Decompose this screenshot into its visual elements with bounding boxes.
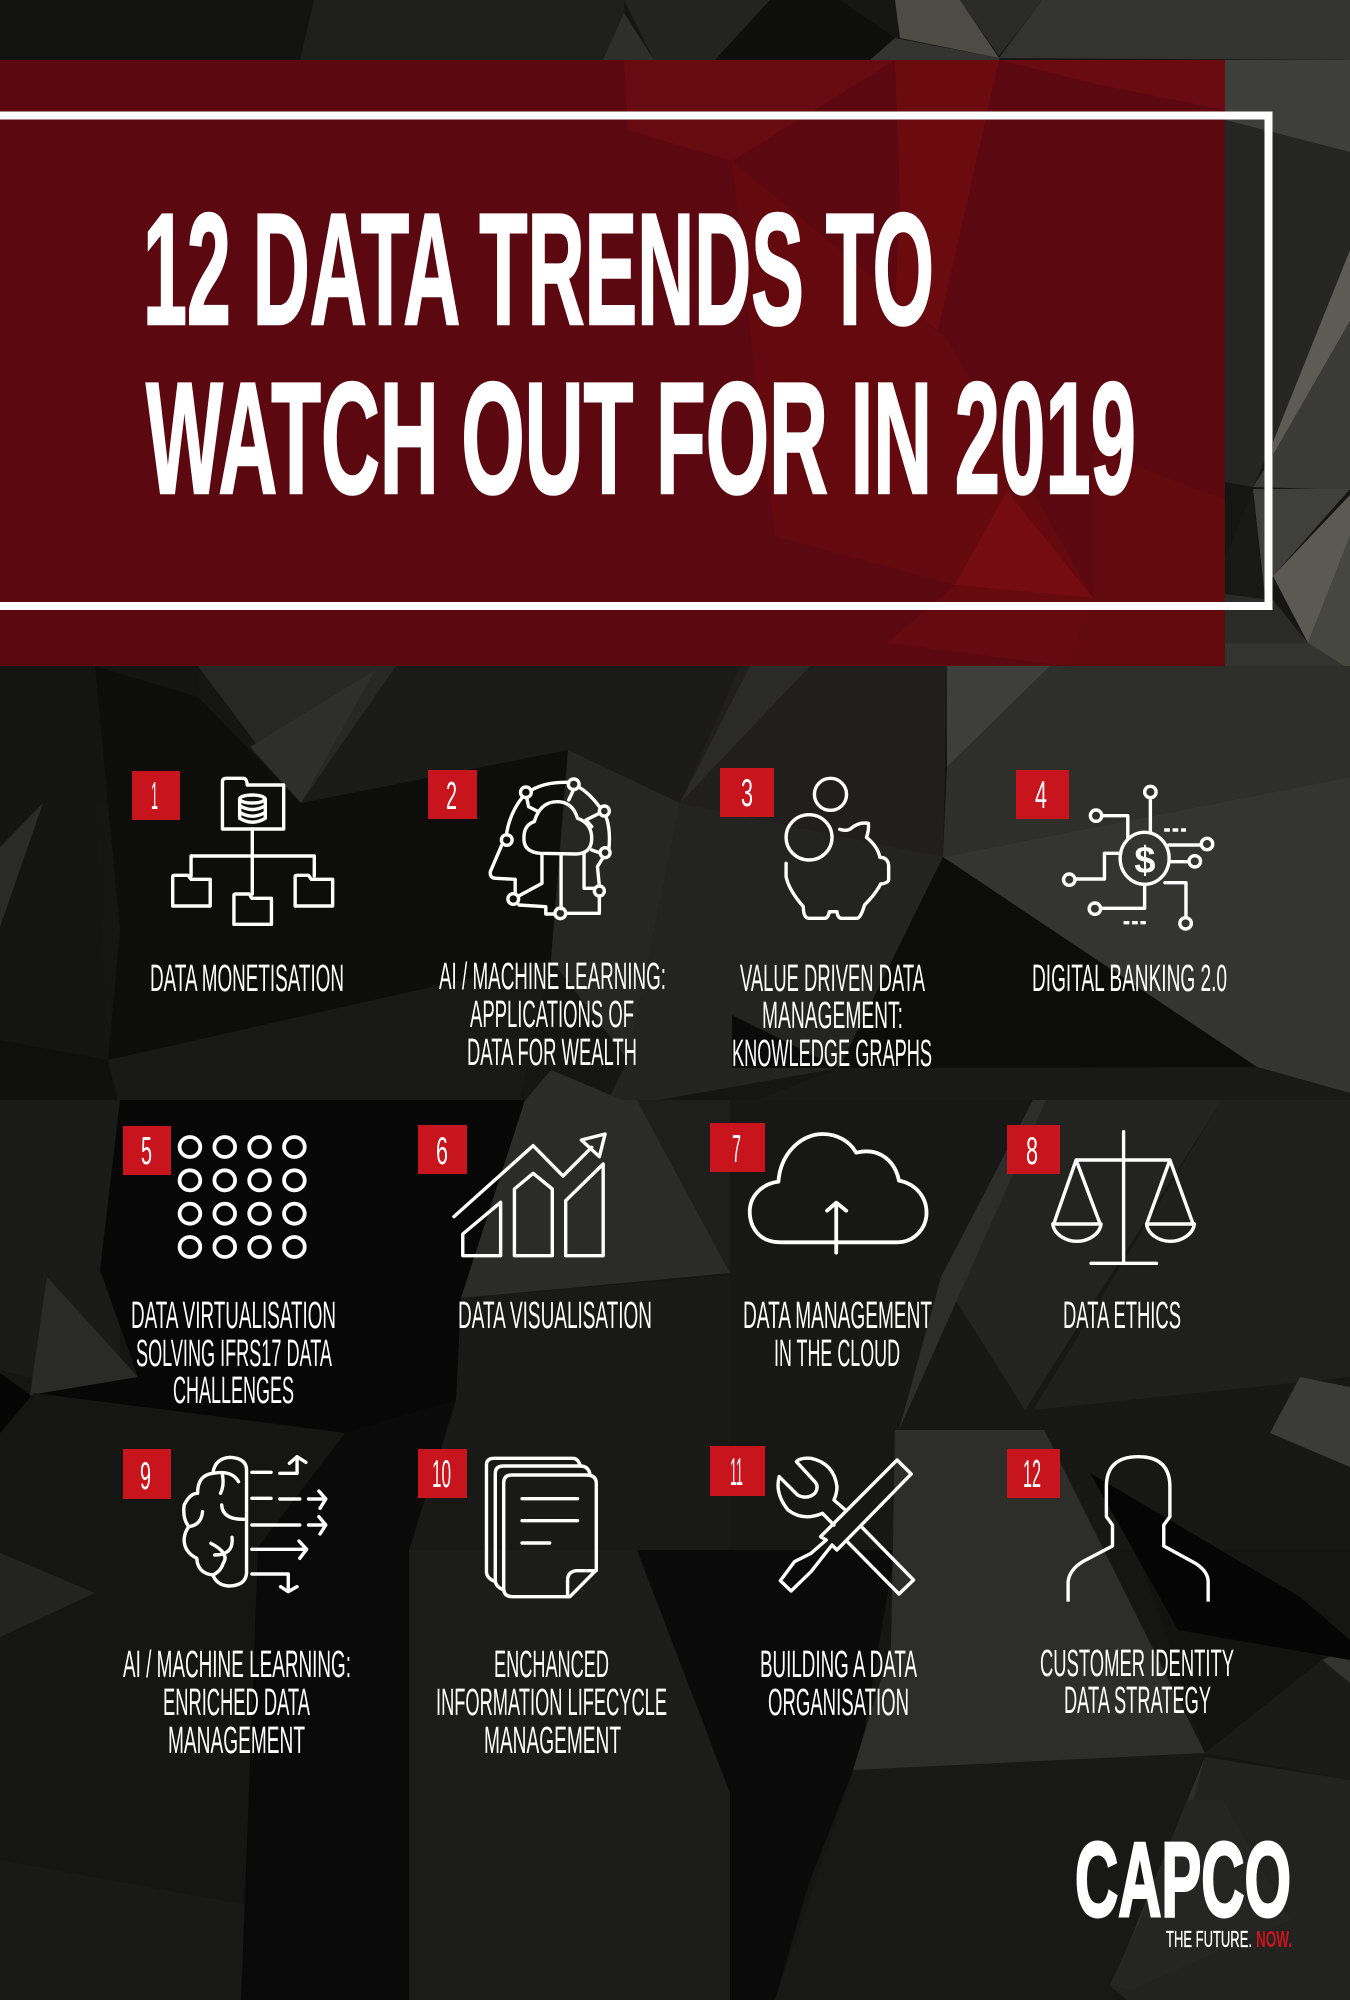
white title frame: [0, 116, 1268, 606]
label: DATA MANAGEMENT: [743, 1295, 932, 1337]
number badge 11: 11: [730, 1451, 743, 1494]
icon: brain with arrows: [184, 1457, 326, 1592]
label: [131, 1295, 336, 1412]
icon: piggy bank and coins: [786, 778, 889, 918]
label: [1040, 1643, 1234, 1722]
icon: person silhouette: [1068, 1457, 1208, 1602]
icon: dollar circuit: $: [1134, 840, 1156, 882]
number badge 7: 7: [732, 1128, 741, 1171]
label: APPLICATIONS OF: [470, 994, 634, 1036]
trend 8: data ethics: [1007, 1125, 1194, 1337]
label: ENCHANCED: [494, 1644, 609, 1686]
infographic canvas: BUILDING A DATA: [760, 1644, 917, 1686]
number badge 1: [132, 771, 180, 820]
number badge 10: 10: [432, 1453, 451, 1496]
number badge 5: [123, 1126, 171, 1175]
infographic canvas: SOLVING IFRS17 DATA: [136, 1333, 332, 1375]
trend 3: value driven data management: [720, 768, 932, 1075]
number badge 2: 2: [446, 775, 457, 818]
label: [732, 958, 932, 1075]
logo: Capco with tagline: NOW.: [1256, 1926, 1292, 1952]
label: VALUE DRIVEN DATA: [740, 958, 925, 1000]
panel: dark red title banner: [0, 60, 1225, 666]
trend 9: AI machine learning enriched data: [123, 1449, 351, 1762]
number badge 2: [428, 770, 477, 819]
label: ENRICHED DATA: [163, 1682, 310, 1724]
trend 12: customer identity data strategy: [1007, 1449, 1234, 1722]
icon: folder hierarchy with database: [173, 778, 333, 924]
number badge 12: [1007, 1449, 1060, 1498]
label: [760, 1644, 917, 1724]
trend 7: data management in the cloud: [710, 1123, 932, 1375]
number badge 4: 4: [1035, 774, 1047, 817]
number badge 8: [1007, 1125, 1060, 1174]
label: [439, 956, 666, 1074]
number badge 3: 3: [741, 772, 753, 815]
infographic canvas: AI / MACHINE LEARNING:: [123, 1644, 351, 1686]
title: [143, 180, 1136, 527]
icon: scales: [1053, 1132, 1194, 1263]
label: CHALLENGES: [173, 1370, 294, 1412]
infographic canvas: AI / MACHINE LEARNING:: [439, 956, 666, 998]
label: [123, 1644, 351, 1762]
trend 6: data visualisation: [418, 1125, 652, 1337]
trend 10: enhanced information lifecycle: [418, 1449, 667, 1762]
infographic canvas: KNOWLEDGE GRAPHS: [732, 1033, 932, 1075]
number badge 9: 9: [140, 1455, 151, 1498]
label: IN THE CLOUD: [774, 1333, 900, 1375]
icon: wrench and screwdriver: [778, 1458, 914, 1594]
number badge 7: [710, 1123, 765, 1172]
label: DATA FOR WEALTH: [467, 1032, 637, 1074]
number badge 8: 8: [1026, 1130, 1038, 1173]
label: MANAGEMENT: [168, 1720, 305, 1762]
trend 11: building a data organisation: [710, 1446, 917, 1724]
trend 5: data virtualisation: [123, 1126, 336, 1412]
icon: cloud upload: [750, 1134, 927, 1253]
trend 2: AI machine learning applications: [428, 770, 666, 1074]
number badge 9: [123, 1449, 171, 1499]
label: MANAGEMENT:: [762, 995, 903, 1037]
infographic canvas: DATA MONETISATION: [150, 958, 344, 1000]
label: [436, 1644, 667, 1762]
number badge 11: [710, 1446, 765, 1496]
label: ORGANISATION: [768, 1682, 909, 1724]
icon: grid of dots: [180, 1137, 305, 1257]
infographic canvas: DATA VIRTUALISATION: [131, 1295, 336, 1337]
icon: stacked documents: [486, 1458, 596, 1597]
icon: rising bar chart with arrow: [454, 1134, 605, 1256]
infographic canvas: INFORMATION LIFECYCLE: [436, 1682, 667, 1724]
number badge 10: [418, 1449, 467, 1498]
number badge 1: 1: [151, 775, 158, 818]
infographic canvas: DATA VISUALISATION: [458, 1295, 652, 1337]
icon: dollar circuit: [1064, 786, 1213, 929]
icon: head with cloud circuit: [490, 779, 610, 919]
number badge 6: [418, 1125, 467, 1174]
logo: Capco with tagline: THE FUTURE.: [1166, 1926, 1252, 1952]
number badge 6: 6: [436, 1130, 448, 1173]
number badge 3: [720, 768, 774, 817]
number badge 5: 5: [141, 1130, 152, 1173]
trend 1: data monetisation: [132, 771, 344, 1000]
number badge 4: [1016, 770, 1069, 819]
trend 4: digital banking 2.0: [1016, 770, 1227, 1000]
label: MANAGEMENT: [484, 1720, 621, 1762]
trend 8: data ethics: DATA ETHICS: [1063, 1295, 1181, 1337]
number badge 12: 12: [1023, 1453, 1041, 1496]
label: [743, 1295, 932, 1375]
